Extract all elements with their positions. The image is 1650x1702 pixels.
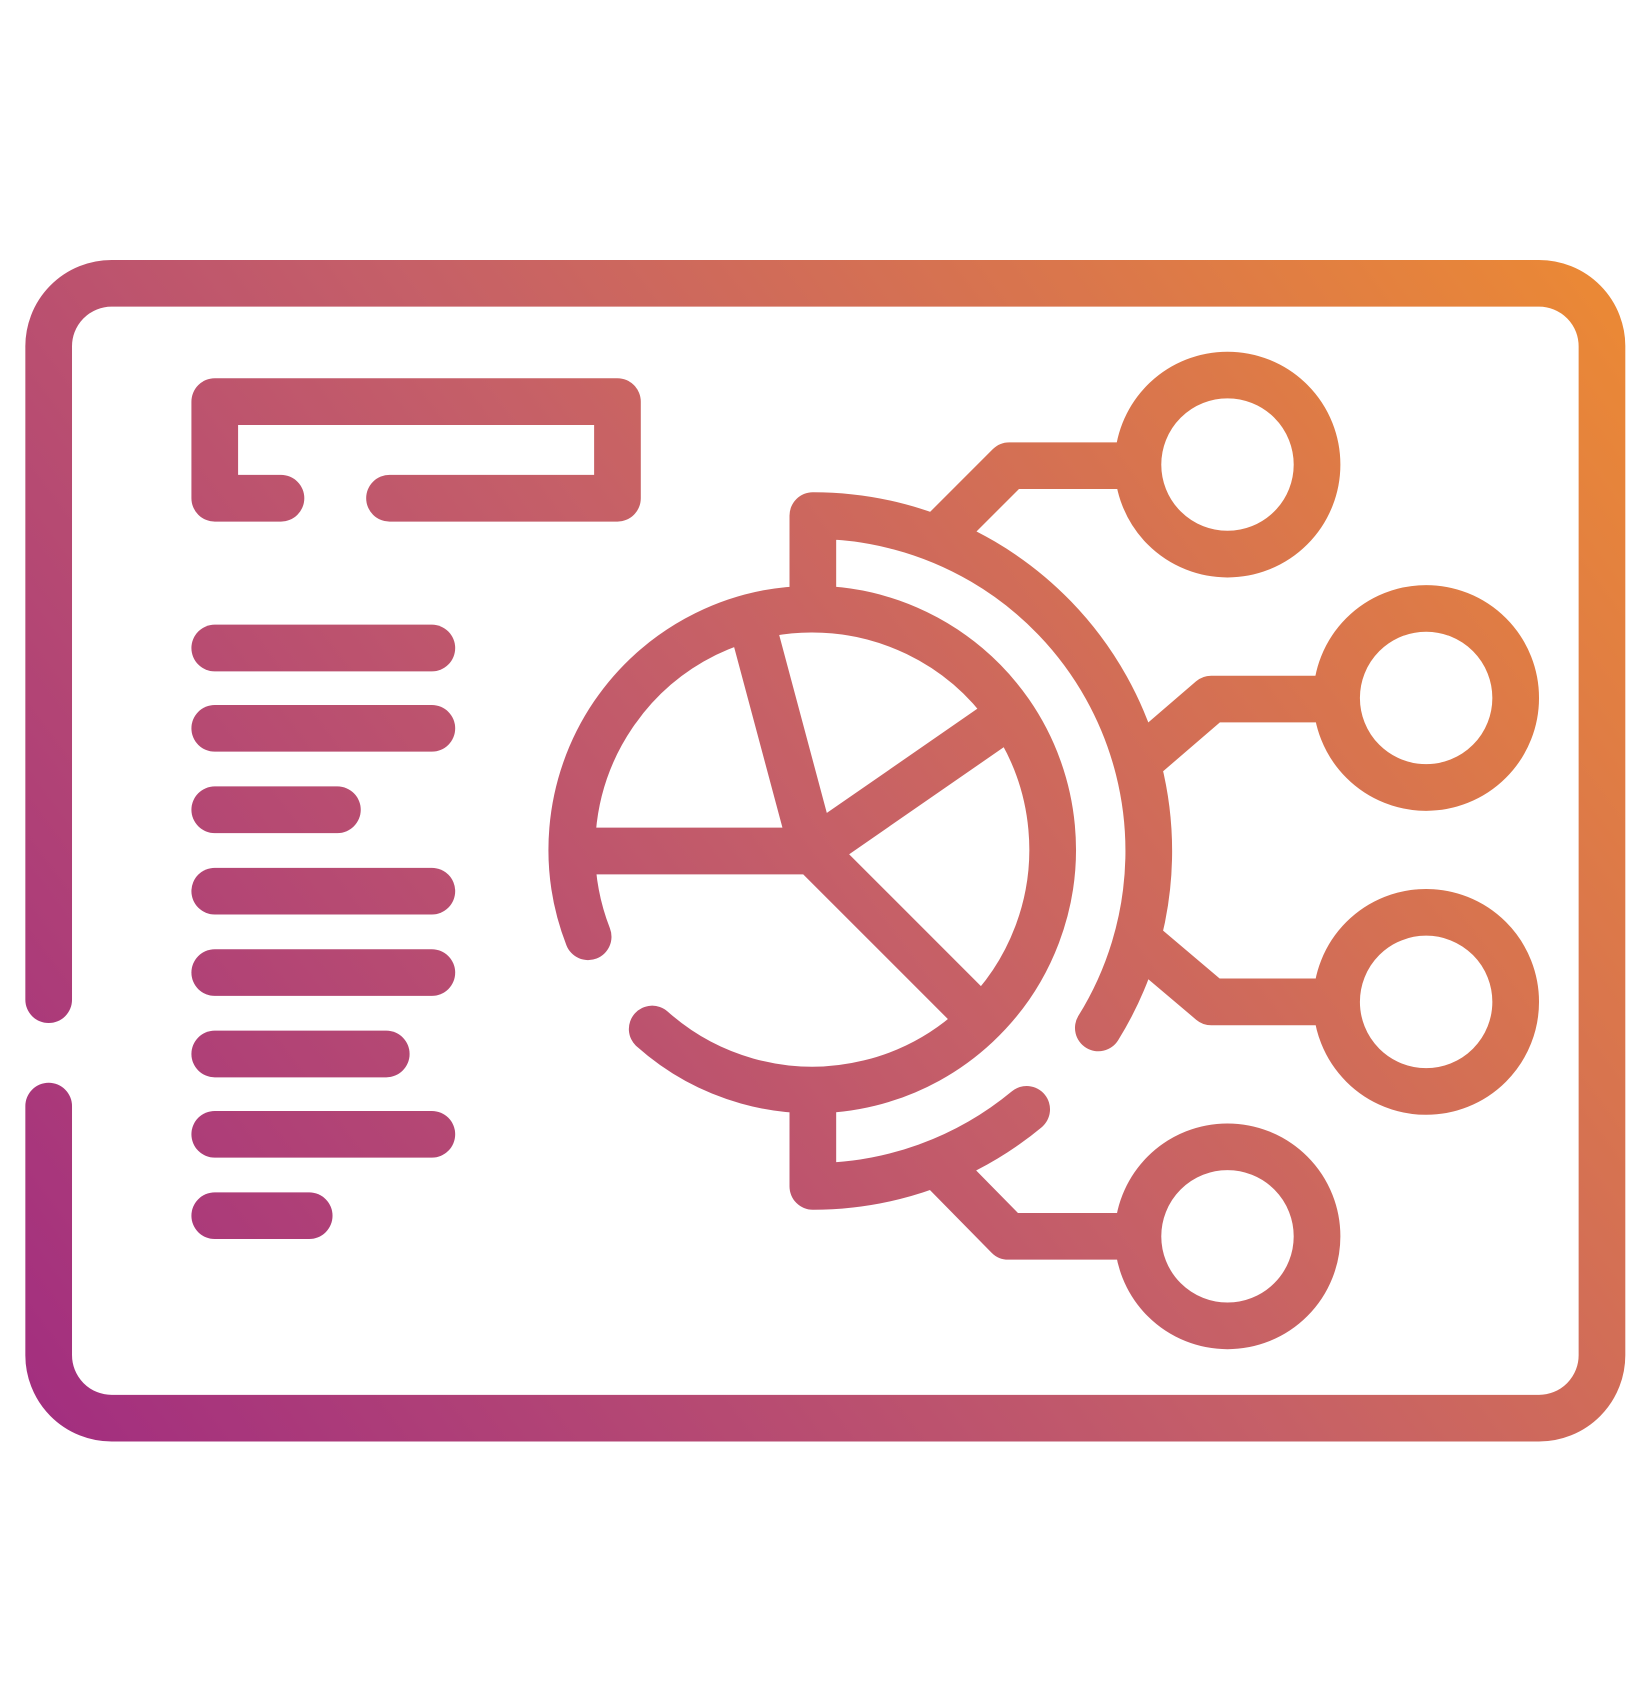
node: upper right connector (1141, 608, 1516, 788)
chart: outer ring arcs (813, 516, 1149, 1186)
node: bottom connector (943, 1147, 1317, 1326)
pie slices (573, 620, 1010, 1020)
node: lower right connector (1141, 912, 1516, 1091)
panel: tablet frame (49, 283, 1602, 1418)
upper arc (813, 516, 1149, 1028)
text block: list lines (215, 648, 432, 1216)
chart: pie chart (572, 609, 1053, 1090)
lower arc (813, 1103, 1027, 1186)
heading: title box (215, 402, 617, 498)
node: top connector (943, 375, 1317, 554)
pie outline (572, 609, 1053, 1090)
